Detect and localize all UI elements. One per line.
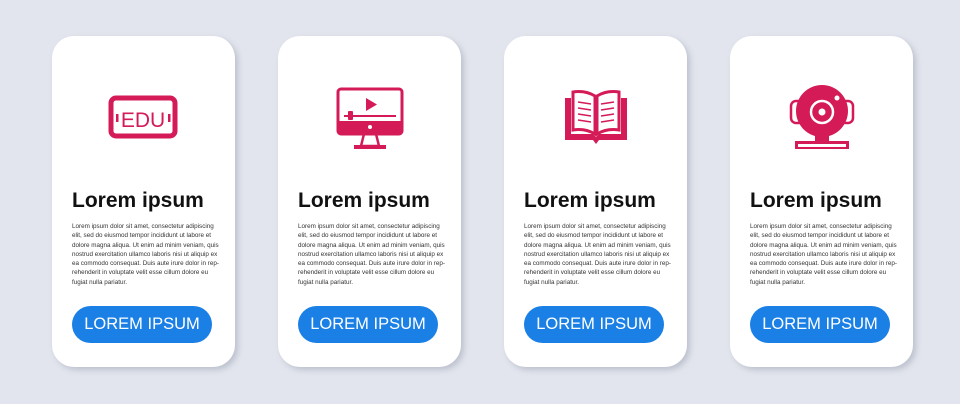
button bbox=[750, 306, 890, 343]
card 3 bbox=[504, 36, 687, 367]
icon: monitor video bbox=[336, 88, 404, 149]
icon: EDU phone bbox=[108, 96, 178, 138]
text block: Lorem ipsum dolor sit amet, consectetur adipiscing elit, sed do eiusmod tempor incididunt ut labore et dolore magna aliqua. Ut enim ad minim veniam, quis nostrud exercitation ullamco laboris nisi ut aliquip ex ea commodo consequat. Duis aute irure dolor in rep-rehenderit in voluptate velit esse cillum dolore eu fugiat nulla pariatur. bbox=[72, 223, 219, 286]
button bbox=[298, 306, 438, 343]
heading: Lorem ipsum bbox=[524, 189, 656, 212]
card 1 bbox=[52, 36, 235, 367]
heading: Lorem ipsum bbox=[750, 189, 882, 212]
card 2 bbox=[278, 36, 461, 367]
text block: Lorem ipsum dolor sit amet, consectetur adipiscing elit, sed do eiusmod tempor incididunt ut labore et dolore magna aliqua. Ut enim ad minim veniam, quis nostrud exercitation ullamco laboris nisi ut aliquip ex ea commodo consequat. Duis aute irure dolor in rep-rehenderit in voluptate velit esse cillum dolore eu fugiat nulla pariatur. bbox=[298, 223, 445, 286]
heading: Lorem ipsum bbox=[72, 189, 204, 212]
button: LOREM IPSUM bbox=[84, 315, 200, 333]
button bbox=[524, 306, 664, 343]
button: LOREM IPSUM bbox=[310, 315, 426, 333]
text block: Lorem ipsum dolor sit amet, consectetur adipiscing elit, sed do eiusmod tempor incididunt ut labore et dolore magna aliqua. Ut enim ad minim veniam, quis nostrud exercitation ullamco laboris nisi ut aliquip ex ea commodo consequat. Duis aute irure dolor in rep-rehenderit in voluptate velit esse cillum dolore eu fugiat nulla pariatur. bbox=[524, 223, 671, 286]
icon: open book bbox=[565, 90, 627, 144]
icon: EDU phone: EDU bbox=[121, 109, 165, 132]
button: LOREM IPSUM bbox=[762, 315, 878, 333]
icon: webcam bbox=[790, 85, 854, 149]
button bbox=[72, 306, 212, 343]
heading: Lorem ipsum bbox=[298, 189, 430, 212]
card 4 bbox=[730, 36, 913, 367]
text block: Lorem ipsum dolor sit amet, consectetur adipiscing elit, sed do eiusmod tempor incididunt ut labore et dolore magna aliqua. Ut enim ad minim veniam, quis nostrud exercitation ullamco laboris nisi ut aliquip ex ea commodo consequat. Duis aute irure dolor in rep-rehenderit in voluptate velit esse cillum dolore eu fugiat nulla pariatur. bbox=[750, 223, 897, 286]
button: LOREM IPSUM bbox=[536, 315, 652, 333]
